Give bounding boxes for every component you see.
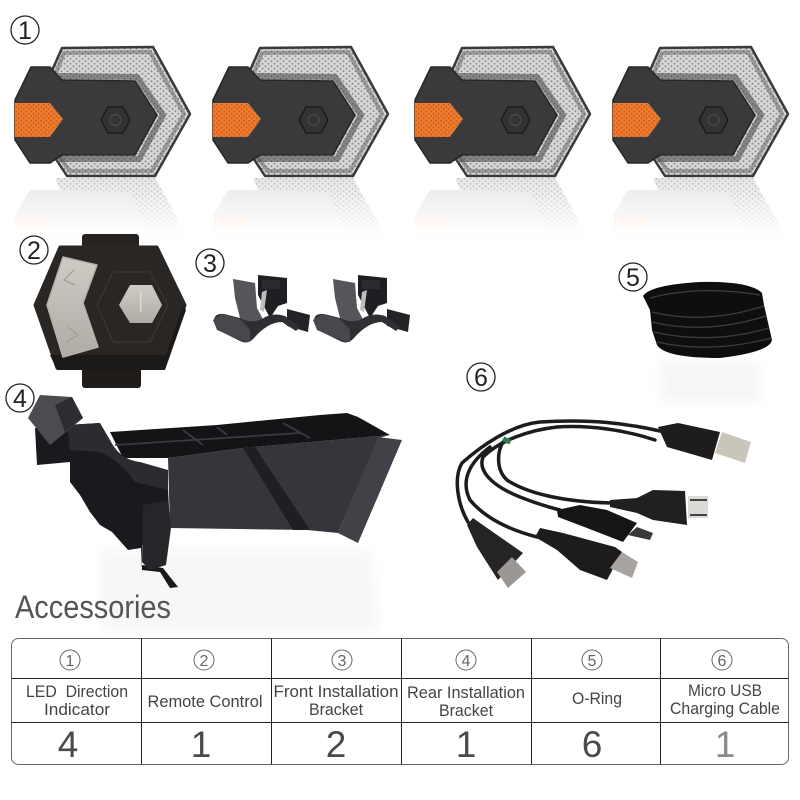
number badge 5 — [619, 263, 647, 292]
table row: item names: Bracket — [309, 700, 363, 719]
table row: circled numbers: 4 — [462, 653, 471, 670]
USB-C plug — [467, 518, 523, 580]
item 6: micro USB charging cable — [457, 421, 751, 588]
table row: item names: Indicator — [44, 700, 110, 719]
table row: item names: O-Ring — [572, 689, 622, 708]
number badge 6: 6 — [474, 364, 488, 392]
number badge 4: 4 — [13, 385, 27, 413]
table row: item names: LED Direction — [26, 682, 128, 701]
table row: quantities: 6 — [582, 724, 602, 765]
table row: quantities: 4 — [58, 724, 78, 765]
table row: quantities: 1 — [456, 724, 476, 765]
diagonal rib — [243, 447, 310, 530]
table row: circled numbers: 6 — [718, 653, 727, 670]
indicator 2 — [208, 47, 398, 243]
indicator 1 — [10, 47, 200, 243]
table row: quantities: 1 — [191, 724, 211, 765]
table row: circled numbers — [60, 650, 732, 670]
table row: item names: Remote Control — [148, 692, 262, 711]
top block — [28, 395, 83, 445]
number badge 5: 5 — [626, 264, 640, 292]
table row: item names: Rear Installation — [407, 683, 525, 702]
clip tab — [142, 500, 171, 570]
table row: quantities: 1 — [715, 724, 735, 765]
number badge 4 — [6, 384, 34, 413]
micro USB plug 2 — [557, 505, 637, 542]
table row: item names: Charging Cable — [670, 699, 780, 718]
table row: circled numbers: 1 — [66, 653, 75, 670]
item 2: remote control — [35, 234, 186, 388]
end plate — [338, 437, 402, 543]
number badge 1 — [11, 16, 39, 45]
lower stepped mass — [35, 423, 178, 588]
table row: item names — [26, 681, 780, 720]
table row: quantities: 2 — [326, 724, 346, 765]
table grid — [12, 638, 788, 764]
number badge 1: 1 — [18, 17, 32, 45]
number badge 2: 2 — [27, 237, 41, 265]
table row: item names: Micro USB — [688, 681, 762, 700]
indicator 4 — [608, 47, 798, 243]
item 5: O-rings coil — [643, 282, 772, 402]
number badge 3 — [196, 249, 224, 278]
table row: item names: Bracket — [439, 701, 493, 720]
table row: quantities — [58, 724, 735, 765]
accessories table — [12, 638, 788, 765]
main face — [168, 435, 390, 533]
floor shadow under bracket — [100, 550, 380, 630]
table row: circled numbers: 5 — [588, 653, 597, 670]
cable strands — [457, 421, 660, 537]
USB-A plug — [658, 423, 720, 460]
number badge 2 — [20, 236, 48, 265]
number badge 6 — [467, 363, 495, 392]
item 4: rear installation bracket — [28, 395, 402, 588]
micro USB plug 3 — [535, 528, 622, 580]
item 3: front installation brackets — [213, 275, 410, 342]
table row: circled numbers: 2 — [200, 653, 209, 670]
bracket left — [213, 275, 310, 342]
bracket right — [313, 275, 410, 342]
table row: item names: Front Installation — [274, 682, 398, 701]
heading: Accessories: Accessories — [15, 589, 171, 625]
number badge 3: 3 — [203, 250, 217, 278]
micro USB plug 1 — [610, 490, 687, 525]
top cavity — [110, 413, 390, 458]
item 1: four LED direction indicators — [10, 47, 798, 243]
indicator 3 — [410, 47, 600, 243]
table row: circled numbers: 3 — [338, 653, 347, 670]
curved ridge — [67, 423, 168, 490]
